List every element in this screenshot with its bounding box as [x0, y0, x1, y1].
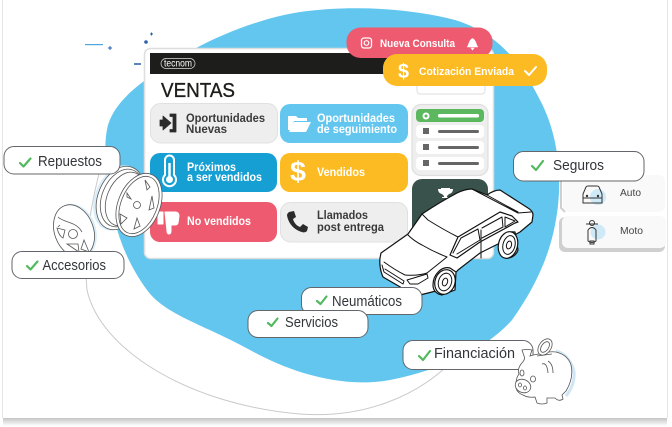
header bar [150, 53, 400, 74]
panel: ventas dashboard [144, 48, 494, 258]
notification: cotizacion enviada: Cotización Enviada [419, 66, 515, 78]
decorative sparkles [85, 32, 153, 65]
heading: VENTAS: VENTAS [161, 80, 235, 102]
label: financiacion: Financiación [434, 346, 515, 362]
button: no vendidos [150, 202, 277, 242]
notification: cotizacion enviada [383, 54, 547, 86]
notification: nueva consulta: Nueva Consulta [380, 38, 456, 50]
label: financiacion [403, 340, 533, 370]
label: neumaticos [302, 288, 422, 314]
list widget [412, 104, 488, 176]
button: oportunidades nuevas [150, 104, 278, 143]
label: repuestos: Repuestos [38, 154, 102, 170]
label: accesorios: Accesorios [42, 258, 106, 274]
label: servicios [248, 310, 368, 338]
label: repuestos [4, 146, 120, 174]
label: seguros: Seguros [553, 158, 604, 174]
blue background blob [105, 8, 559, 382]
notification: nueva consulta [346, 28, 492, 58]
logo: tecnom: tecnom [164, 58, 192, 70]
button: oportunidades de seguimiento [280, 104, 408, 143]
label: servicios: Servicios [285, 315, 338, 331]
button: vendidos [280, 153, 408, 192]
button: vendidos: Vendidos [317, 167, 365, 179]
button: oportunidades nuevas: Oportunidades [186, 113, 265, 125]
button: llamados post entrega: post entrega [317, 222, 385, 234]
button: proximos a ser vendidos: Próximos [187, 162, 236, 174]
illustration: large wheel [84, 158, 171, 243]
label: accesorios [12, 252, 124, 278]
button: llamados post entrega: Llamados [317, 210, 368, 222]
button: oportunidades de seguimiento: Oportunidades [317, 113, 395, 125]
button: vendidos: $ [290, 156, 306, 187]
button: proximos a ser vendidos [150, 153, 277, 192]
thin gray arc [86, 130, 445, 415]
text: moto: Moto [620, 225, 643, 237]
button: llamados post entrega [280, 202, 408, 242]
card: seguro auto [561, 175, 665, 212]
label: neumaticos: Neumáticos [332, 294, 402, 310]
button: no vendidos: No vendidos [187, 216, 251, 228]
illustration: car [380, 189, 533, 297]
notification: cotizacion enviada: $ [398, 61, 409, 83]
card: seguro moto [559, 216, 666, 252]
label: seguros [514, 152, 644, 181]
button: oportunidades nuevas: Nuevas [186, 124, 227, 136]
button: proximos a ser vendidos: a ser vendidos [187, 172, 262, 184]
illustration: piggy bank with coin [513, 336, 574, 404]
trophy card [412, 179, 488, 241]
illustration: small wheel [46, 198, 104, 264]
partial white card behind notifications [417, 80, 485, 94]
text: auto: Auto [620, 187, 641, 199]
button: oportunidades de seguimiento: de seguimiento [317, 124, 397, 136]
